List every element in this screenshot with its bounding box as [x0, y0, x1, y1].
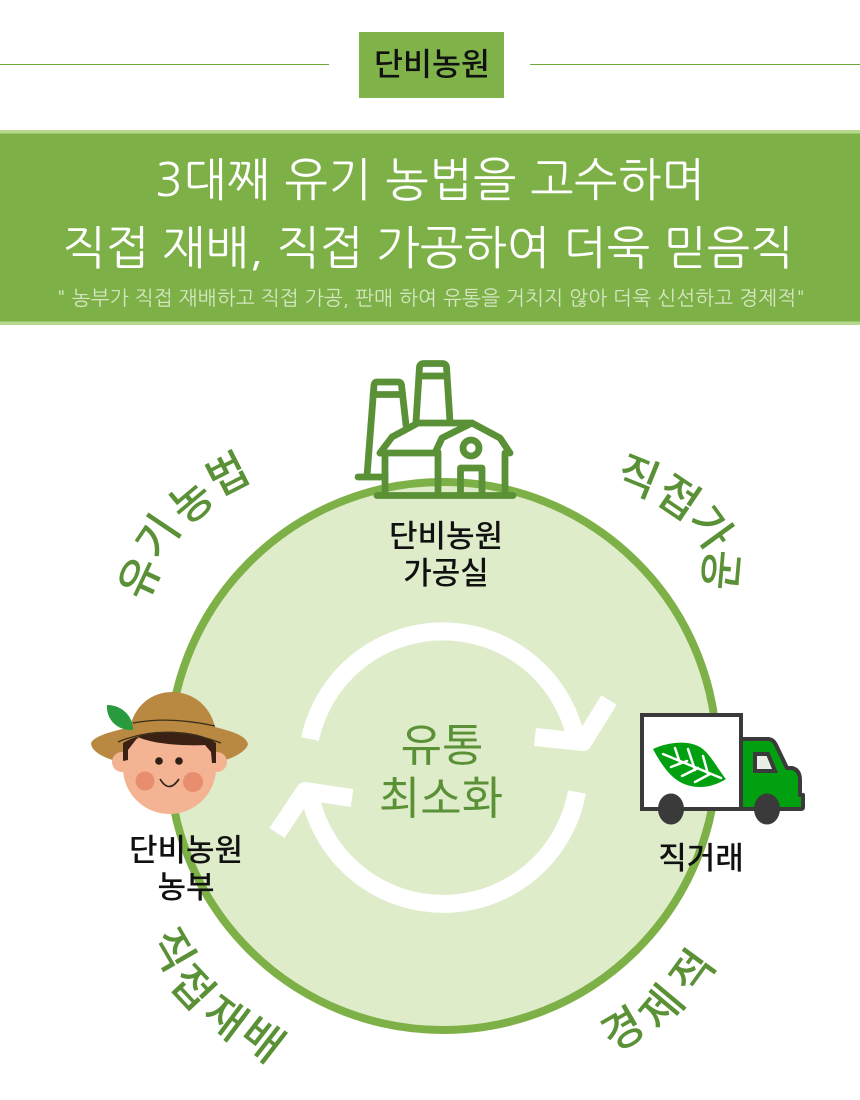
- farmer eyes: [155, 757, 183, 765]
- label: 단비농원 농부: 단비농원: [129, 833, 243, 868]
- banner title line 2: 직접 재배, 직접 가공하여 더욱 믿음직: [62, 225, 794, 271]
- curved label: 직접가공: 직: [610, 447, 666, 508]
- curved label: 직접가공: 공: [693, 548, 746, 592]
- label: 단비농원 농부: 농부: [157, 870, 215, 905]
- truck wheels: [658, 794, 780, 824]
- icon: delivery truck: [642, 715, 803, 824]
- label: 단비농원 가공실: 가공실: [403, 556, 489, 591]
- curved label: 직접가공: 접: [647, 467, 708, 530]
- center label: 유통 최소화: 최소화: [379, 773, 503, 824]
- curved label: 직접가공: [610, 447, 746, 592]
- main circle: [169, 482, 717, 1030]
- heading badge: 단비농원: 단비농원: [374, 46, 490, 82]
- icon: farmer: [91, 692, 248, 814]
- curved label: 유기 농법: 유: [110, 550, 171, 607]
- icon: factory: [358, 364, 513, 496]
- label: 직거래: 직거래: [658, 841, 744, 876]
- curved label: 직접재배: 직: [140, 920, 203, 980]
- banner subtitle: " 농부가 직접 재배하고 직접 가공, 판매 하여 유통을 거치지 않아 더욱 신선하고 경제적": [57, 288, 805, 308]
- farmer face: [123, 734, 216, 814]
- farmer hat: [91, 692, 248, 762]
- center label: 유통 최소화: 유통: [401, 720, 483, 771]
- farmer hair: [123, 732, 216, 763]
- curved label: 직접재배: 배: [231, 1009, 293, 1072]
- heading badge: 단비농원: [359, 32, 504, 98]
- cycle arrows: [277, 631, 609, 904]
- curved label: 유기 농법: 농: [161, 471, 224, 534]
- curved label: 직접가공: 가: [678, 498, 741, 559]
- truck leaf logo: [653, 743, 726, 787]
- truck window: [755, 754, 775, 771]
- truck cab: [741, 739, 803, 809]
- label: 단비농원 가공실: 단비농원: [389, 519, 503, 554]
- curved label: 경제적: [593, 942, 725, 1062]
- truck box: [642, 715, 741, 809]
- farmer leaf: [107, 705, 133, 730]
- curved label: 유기 농법: [110, 444, 257, 607]
- curved label: 직접재배: 접: [160, 957, 223, 1020]
- farmer hat band: [118, 720, 221, 743]
- curved label: 경제적: 제: [631, 977, 694, 1040]
- farmer smile: [160, 779, 179, 786]
- curved label: 직접재배: [140, 920, 293, 1072]
- farmer ears: [112, 752, 227, 772]
- banner title line 1: 3대째 유기 농법을 고수하며: [155, 157, 705, 203]
- curved label: 경제적: 적: [662, 942, 725, 1003]
- farmer cheeks: [136, 772, 203, 792]
- curved label: 유기 농법: 기: [127, 507, 190, 568]
- banner panel: [0, 130, 860, 325]
- curved label: 유기 농법: 법: [199, 444, 257, 506]
- curved label: 경제적: 경: [593, 999, 653, 1062]
- curved label: 직접재배: 재: [194, 987, 256, 1050]
